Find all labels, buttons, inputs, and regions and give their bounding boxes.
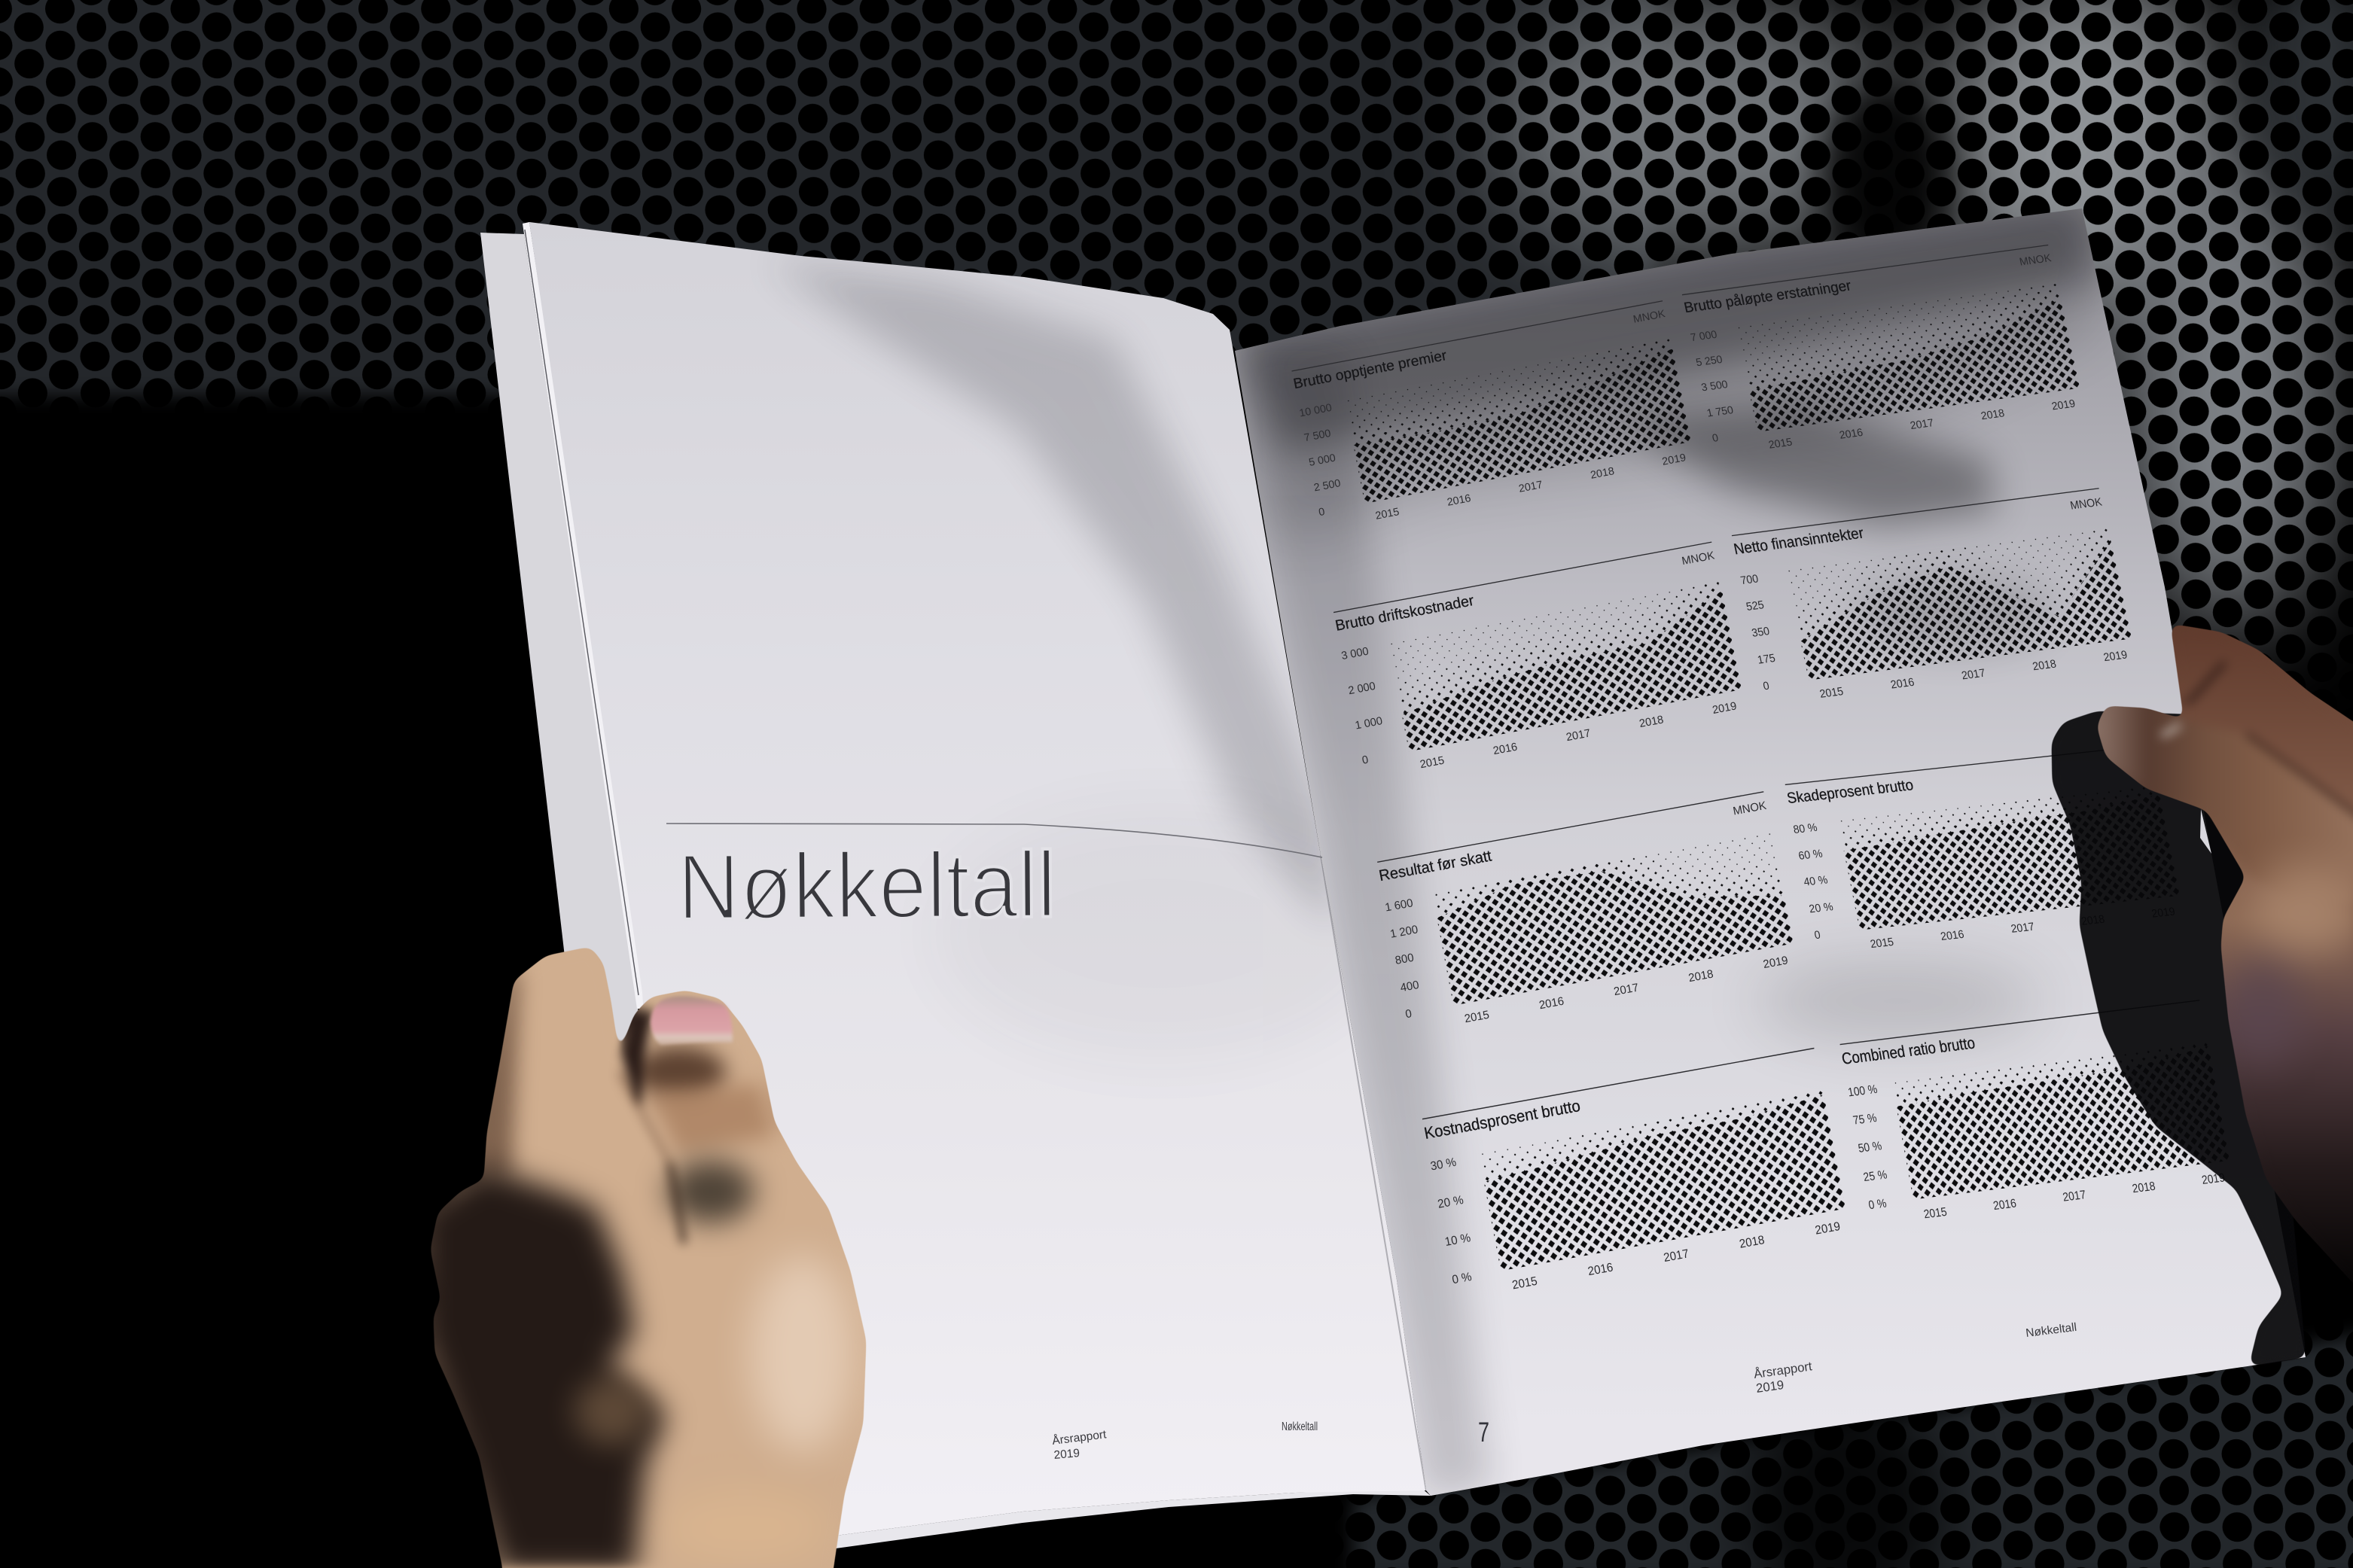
x axis labels	[1818, 649, 2129, 701]
x axis labels: 2015	[1511, 1274, 1538, 1292]
y axis labels: 175	[1757, 653, 1776, 667]
x axis labels: 2016	[1586, 1261, 1614, 1278]
x axis labels: 2019	[1814, 1220, 1842, 1238]
x axis labels	[1870, 906, 2176, 951]
halftone area	[1780, 507, 2137, 687]
chart title: Brutto påløpte erstatninger	[1683, 278, 1853, 316]
page number: 7	[1478, 1417, 1489, 1448]
y axis labels: 10 000	[1298, 402, 1333, 420]
x axis labels: 2017	[1613, 981, 1640, 998]
y axis labels	[1384, 897, 1434, 1021]
y axis labels	[1792, 821, 1839, 942]
halftone area	[1427, 806, 1798, 1012]
x axis labels: 2019	[2150, 906, 2176, 921]
halftone area	[1382, 559, 1747, 758]
halftone area	[1888, 1025, 2235, 1207]
x axis labels	[1464, 954, 1789, 1025]
chart: Combined ratio brutto	[1839, 1000, 2237, 1228]
y axis labels: 800	[1394, 951, 1415, 967]
unit: MNOK	[2069, 496, 2103, 513]
icon: left hand holding the booklet	[418, 947, 866, 1568]
chart title: Netto finansinntekter	[1733, 525, 1866, 558]
x axis labels: 2015	[1767, 437, 1794, 452]
y axis labels: 700	[1739, 573, 1760, 587]
halftone area	[1348, 339, 1690, 504]
unit: MNOK	[1681, 550, 1716, 568]
y axis labels: 60 %	[1797, 848, 1824, 863]
x axis labels: 2018	[2080, 913, 2106, 928]
right page footer: 2019	[1755, 1378, 1785, 1396]
unit: MNOK	[1732, 799, 1767, 818]
y axis labels: 350	[1751, 626, 1771, 640]
halftone area	[1738, 284, 2080, 432]
unit: MNOK	[1632, 308, 1666, 326]
y axis labels	[1340, 646, 1391, 767]
chart title: Skadeprosent brutto	[1785, 777, 1915, 807]
x axis labels: 2015	[1374, 506, 1401, 522]
x axis labels: 2016	[1492, 741, 1519, 757]
thumb	[2097, 706, 2353, 903]
x axis labels: 2016	[1446, 492, 1472, 509]
y axis labels: 0 %	[1867, 1197, 1888, 1212]
y axis labels: 0	[1711, 432, 1720, 445]
x axis labels: 2018	[1980, 407, 2006, 422]
x axis labels: 2016	[1992, 1197, 2017, 1213]
x axis labels: 2017	[1663, 1247, 1690, 1265]
y axis labels: 5 000	[1308, 452, 1337, 469]
y axis labels	[1739, 573, 1782, 693]
chart title: Resultat før skatt	[1378, 848, 1493, 884]
x axis labels: 2018	[1739, 1234, 1766, 1251]
y axis labels	[1847, 1082, 1899, 1212]
x axis labels: 2015	[1419, 755, 1446, 771]
paper sliver beside thumb	[2200, 809, 2211, 854]
y axis labels: 100 %	[1847, 1082, 1879, 1100]
y axis labels: 0 %	[1451, 1271, 1473, 1286]
x axis labels: 2015	[1464, 1009, 1490, 1025]
chart title: Kostnadsprosent brutto	[1422, 1097, 1582, 1143]
x axis labels: 2016	[1538, 994, 1565, 1012]
x axis labels	[1767, 397, 2077, 452]
y axis labels: 0	[1813, 929, 1821, 942]
left page footer: 2019	[1053, 1447, 1080, 1462]
x axis labels	[1419, 700, 1738, 771]
y axis labels: 0	[1404, 1007, 1413, 1021]
chart title: Combined ratio brutto	[1840, 1034, 1977, 1068]
halftone area	[1474, 1073, 1851, 1278]
y axis labels: 20 %	[1437, 1194, 1465, 1211]
thumbnail	[651, 996, 733, 1045]
y axis labels	[1429, 1155, 1479, 1286]
chart: Resultat før skatt	[1376, 791, 1801, 1036]
x axis labels: 2018	[2031, 658, 2058, 673]
x axis labels: 2019	[1762, 954, 1789, 971]
chart: Netto finansinntekter	[1731, 488, 2140, 708]
x axis labels: 2017	[2062, 1188, 2087, 1204]
hand shadow on right page	[2052, 711, 2306, 1366]
right page footer: Nøkkeltall	[2025, 1321, 2077, 1340]
y axis labels: 1 200	[1389, 923, 1419, 941]
y axis labels: 7 500	[1303, 428, 1332, 444]
y axis labels: 2 000	[1347, 680, 1376, 697]
y axis labels: 3 500	[1700, 379, 1729, 394]
x axis labels: 2015	[1922, 1205, 1948, 1222]
x axis labels: 2017	[2010, 921, 2035, 936]
x axis labels: 2017	[1961, 667, 1986, 683]
chart: Brutto driftskostnader	[1333, 541, 1750, 781]
y axis labels: 25 %	[1862, 1168, 1888, 1184]
y axis labels: 525	[1745, 599, 1765, 613]
y axis labels: 1 600	[1384, 897, 1414, 915]
x axis labels: 2016	[1940, 928, 1965, 943]
chart: Brutto opptjente premier	[1291, 300, 1699, 532]
x axis labels: 2019	[1711, 700, 1738, 717]
heading rule	[666, 824, 1322, 857]
y axis labels: 10 %	[1443, 1232, 1472, 1249]
panel: left page	[529, 222, 1426, 1536]
left page footer	[1051, 1420, 1318, 1462]
right page footer	[1753, 1321, 2077, 1396]
y axis labels: 1 000	[1354, 715, 1383, 732]
x axis labels: 2018	[1589, 465, 1615, 482]
x axis labels: 2018	[2131, 1180, 2156, 1196]
unit: MNOK	[2019, 252, 2053, 269]
chart title: Brutto opptjente premier	[1292, 348, 1449, 392]
back sheets of the booklet	[480, 222, 678, 1280]
x axis labels: 2017	[1909, 417, 1935, 432]
x axis labels: 2017	[1518, 479, 1544, 495]
x axis labels: 2016	[1890, 676, 1916, 692]
x axis labels: 2019	[2201, 1171, 2226, 1187]
y axis labels	[1690, 329, 1740, 445]
y axis labels: 75 %	[1852, 1111, 1878, 1128]
y axis labels: 80 %	[1792, 821, 1818, 836]
y axis labels: 400	[1399, 979, 1420, 994]
y axis labels: 2 500	[1313, 477, 1342, 494]
y axis labels: 5 250	[1695, 354, 1724, 369]
chart title: Brutto driftskostnader	[1334, 592, 1476, 635]
y axis labels: 1 750	[1705, 404, 1735, 420]
x axis labels: 2015	[1870, 936, 1895, 951]
halftone area	[1835, 774, 2184, 937]
y axis labels: 3 000	[1340, 646, 1370, 662]
x axis labels: 2018	[1687, 967, 1714, 985]
x axis labels: 2019	[2050, 397, 2077, 413]
x axis labels: 2018	[1638, 714, 1665, 730]
y axis labels: 50 %	[1857, 1139, 1883, 1155]
x axis labels	[1374, 452, 1687, 522]
chart: Skadeprosent brutto	[1785, 745, 2187, 957]
title: Nøkkeltall: Nøkkeltall	[677, 833, 1056, 939]
y axis labels: 40 %	[1803, 874, 1829, 889]
right page footer: Årsrapport	[1753, 1359, 1813, 1381]
y axis labels: 0	[1762, 680, 1770, 693]
x axis labels	[1511, 1220, 1842, 1292]
y axis labels: 30 %	[1429, 1155, 1458, 1174]
x axis labels: 2017	[1565, 727, 1592, 744]
left page footer: Nøkkeltall	[1282, 1420, 1318, 1433]
icon: right hand holding the booklet	[2097, 624, 2353, 1295]
panel: right page	[1205, 181, 2334, 1521]
x axis labels: 2015	[1818, 686, 1845, 701]
x axis labels: 2019	[1661, 452, 1687, 468]
lower page edge	[836, 1488, 1431, 1548]
y axis labels: 0	[1318, 506, 1326, 519]
y axis labels	[1298, 402, 1352, 519]
x axis labels: 2019	[2102, 649, 2129, 664]
x axis labels: 2016	[1838, 427, 1864, 442]
y axis labels: 20 %	[1808, 901, 1834, 916]
y axis labels: 7 000	[1690, 329, 1718, 344]
chart: Kostnadsprosent brutto	[1422, 1047, 1854, 1302]
chart: Brutto påløpte erstatninger	[1681, 245, 2088, 458]
x axis labels	[1922, 1171, 2226, 1222]
y axis labels: 0	[1361, 754, 1370, 767]
left page footer: Årsrapport	[1051, 1428, 1108, 1448]
